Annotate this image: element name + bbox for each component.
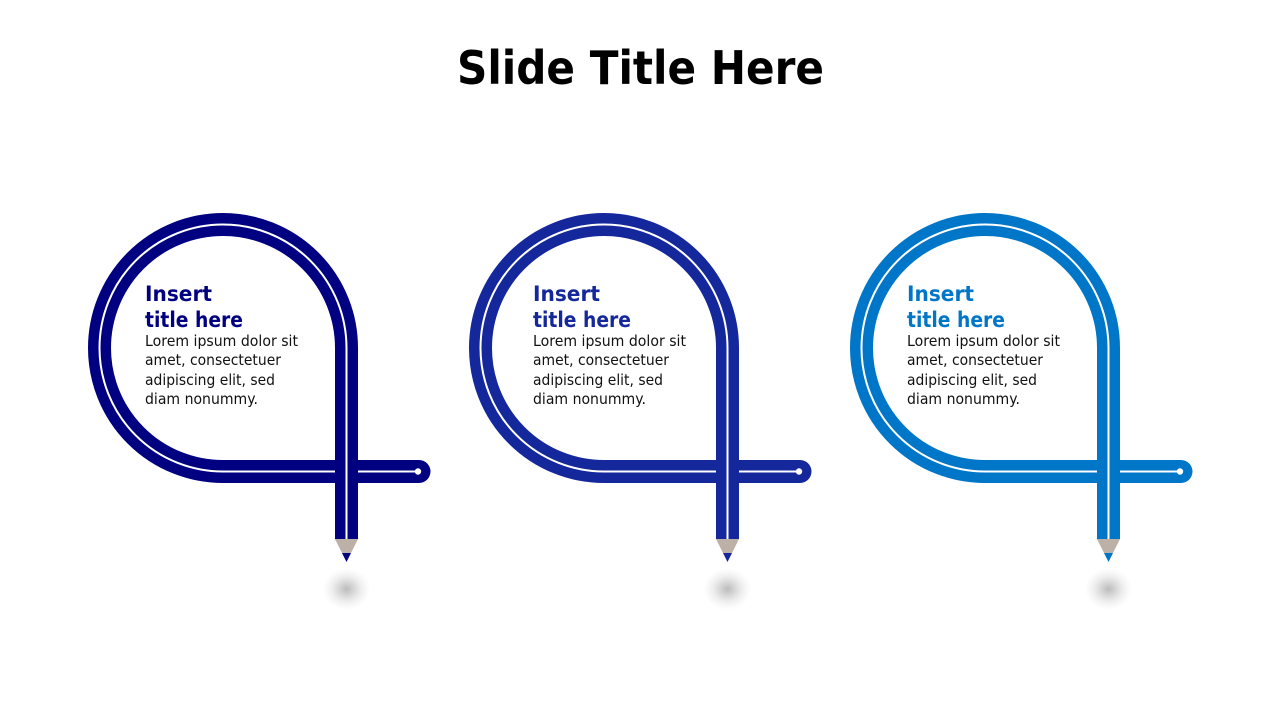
- pencil body 1: [335, 440, 358, 539]
- pencil body 2: [716, 440, 739, 539]
- text block: step 3: [907, 282, 1060, 408]
- heading: step 1: title here: [145, 308, 243, 332]
- shadow: pencil 2: [704, 568, 752, 610]
- body: step 2: amet, consectetuer: [533, 351, 670, 369]
- pencil lead 3: [1104, 553, 1113, 562]
- heading: step 2: [533, 282, 631, 332]
- body: step 1: adipiscing elit, sed: [145, 371, 275, 389]
- body: step 3: diam nonummy.: [907, 390, 1020, 408]
- loop: pencil 1 outline: [100, 225, 419, 500]
- pencil lead 1: [342, 553, 351, 562]
- panel: step 1 pencil loop: [100, 225, 421, 610]
- title: Slide Title Here: [457, 41, 824, 95]
- body: step 3: adipiscing elit, sed: [907, 371, 1037, 389]
- body: step 1: amet, consectetuer: [145, 351, 282, 369]
- pencil body 3: [1097, 440, 1120, 539]
- pencil wood tip 3: [1097, 539, 1120, 553]
- body: step 2: Lorem ipsum dolor sit: [533, 332, 686, 350]
- heading: step 3: [907, 282, 1005, 332]
- heading: step 1: Insert: [145, 282, 212, 306]
- body: step 3: [907, 332, 1060, 408]
- shadow: pencil 3: [1084, 568, 1132, 610]
- body: step 2: adipiscing elit, sed: [533, 371, 663, 389]
- heading: step 3: Insert: [907, 282, 974, 306]
- loop: pencil 2 outline: [481, 225, 800, 500]
- body: step 1: [145, 332, 298, 408]
- body: step 3: amet, consectetuer: [907, 351, 1044, 369]
- panel: step 2 pencil loop: [481, 225, 802, 610]
- highlight: loop 2 inner line: [481, 225, 799, 539]
- loop: pencil 3 outline: [862, 225, 1181, 500]
- heading: step 2: title here: [533, 308, 631, 332]
- body: step 2: diam nonummy.: [533, 390, 646, 408]
- shadow: pencil 1: [322, 568, 370, 610]
- highlight: loop 1 inner line: [100, 225, 418, 539]
- heading: step 3: title here: [907, 308, 1005, 332]
- pencil wood tip 1: [335, 539, 358, 553]
- pencil lead 2: [723, 553, 732, 562]
- icon: line end dot 3: [1177, 468, 1183, 475]
- highlight: loop 3 inner line: [862, 225, 1180, 539]
- body: step 1: diam nonummy.: [145, 390, 258, 408]
- text block: step 2: [533, 282, 686, 408]
- body: step 3: Lorem ipsum dolor sit: [907, 332, 1060, 350]
- icon: line end dot 1: [415, 468, 421, 475]
- icon: line end dot 2: [796, 468, 802, 475]
- panel: step 3 pencil loop: [862, 225, 1183, 610]
- text block: step 1: [145, 282, 298, 408]
- heading: step 2: Insert: [533, 282, 600, 306]
- pencil wood tip 2: [716, 539, 739, 553]
- body: step 1: Lorem ipsum dolor sit: [145, 332, 298, 350]
- heading: step 1: [145, 282, 243, 332]
- body: step 2: [533, 332, 686, 408]
